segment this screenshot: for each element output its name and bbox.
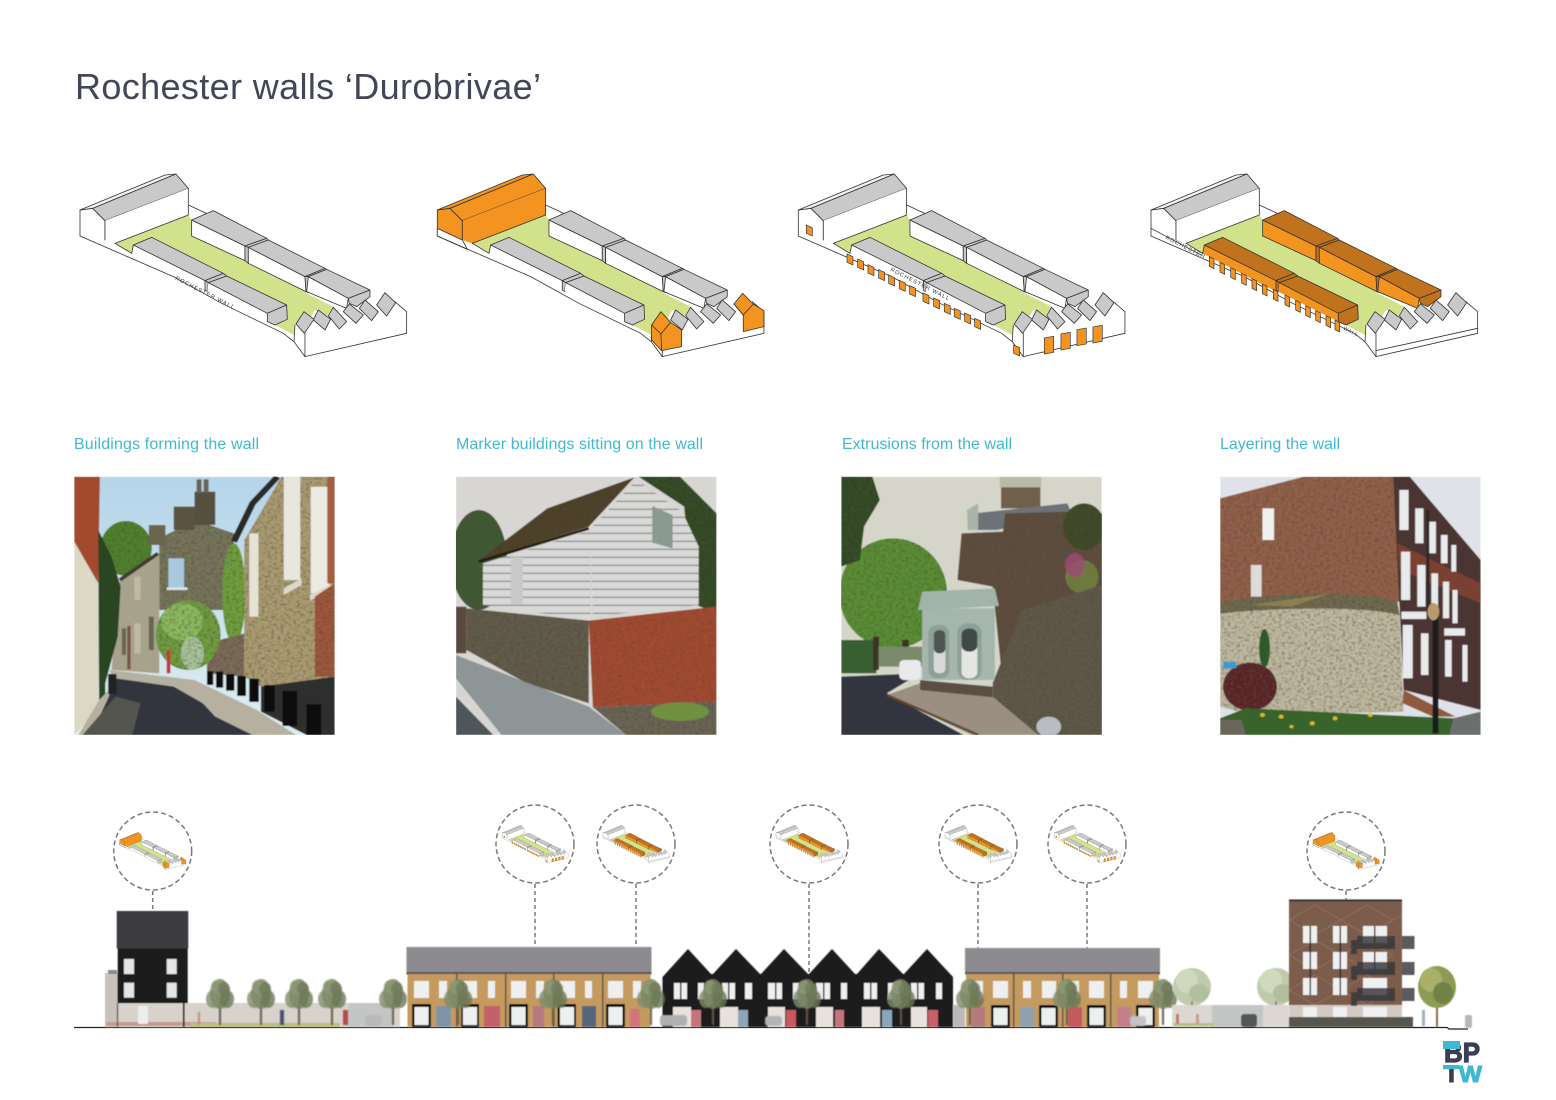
photo: brick building behind rounded stone bastion	[1220, 477, 1481, 735]
diagram: buildings forming the wall: ROCHESTER WALL	[174, 276, 236, 311]
callout: extrusions, right terrace	[1048, 805, 1126, 883]
building: black gabled terrace	[662, 949, 953, 1027]
callout: marker buildings, apartment block	[1307, 812, 1385, 890]
street trees: terraces	[444, 979, 1177, 1026]
label: layering: Layering the wall	[1220, 436, 1340, 453]
diagram: marker buildings sitting on the wall	[437, 174, 764, 357]
background trees and street wall: right	[1172, 968, 1295, 1027]
trees and figures: left street	[198, 979, 407, 1026]
building: timber terrace, left	[406, 947, 652, 1027]
callout: marker buildings, left house	[114, 812, 192, 890]
logo: BPTW	[1443, 1037, 1482, 1087]
logo: BPTW: BP	[1444, 1037, 1480, 1068]
callout: layering, left terrace	[597, 805, 675, 883]
label: extrusions: Extrusions from the wall	[842, 436, 1012, 453]
photo: narrow lane beside brick buildings	[74, 477, 335, 735]
street wall: left section	[105, 970, 400, 1027]
label: marker buildings: Marker buildings sitting on the wall	[456, 436, 703, 453]
logo: BPTW: TW	[1444, 1061, 1482, 1087]
building: timber terrace, right	[953, 948, 1160, 1027]
callout: layering, right terrace	[939, 805, 1017, 883]
title: Rochester walls ‘Durobrivae’	[75, 66, 541, 107]
diagram: layering the wall: ROCHESTER	[1164, 235, 1206, 261]
callout stems	[153, 884, 1346, 973]
diagram: extrusions from the wall	[798, 174, 1125, 357]
callout: layering, black terrace	[770, 805, 848, 883]
photo: green bay extension against the stone wall	[839, 477, 1105, 737]
photo: white weatherboarded building on the wall	[451, 477, 717, 735]
diagram: layering the wall	[1151, 174, 1478, 357]
ground line	[74, 1028, 1468, 1029]
diagram: extrusions from the wall: ROCHESTER WALL	[889, 267, 951, 303]
label: buildings forming the wall: Buildings forming the wall	[74, 436, 259, 453]
callout: extrusions, left terrace	[496, 805, 574, 883]
building: black marker house	[117, 911, 188, 1027]
diagram: layering the wall: WALL	[1342, 326, 1359, 338]
building: brick apartment block	[1289, 900, 1414, 1027]
tree, figure and car: right end	[1418, 966, 1472, 1028]
diagram: buildings forming the wall	[80, 174, 407, 357]
